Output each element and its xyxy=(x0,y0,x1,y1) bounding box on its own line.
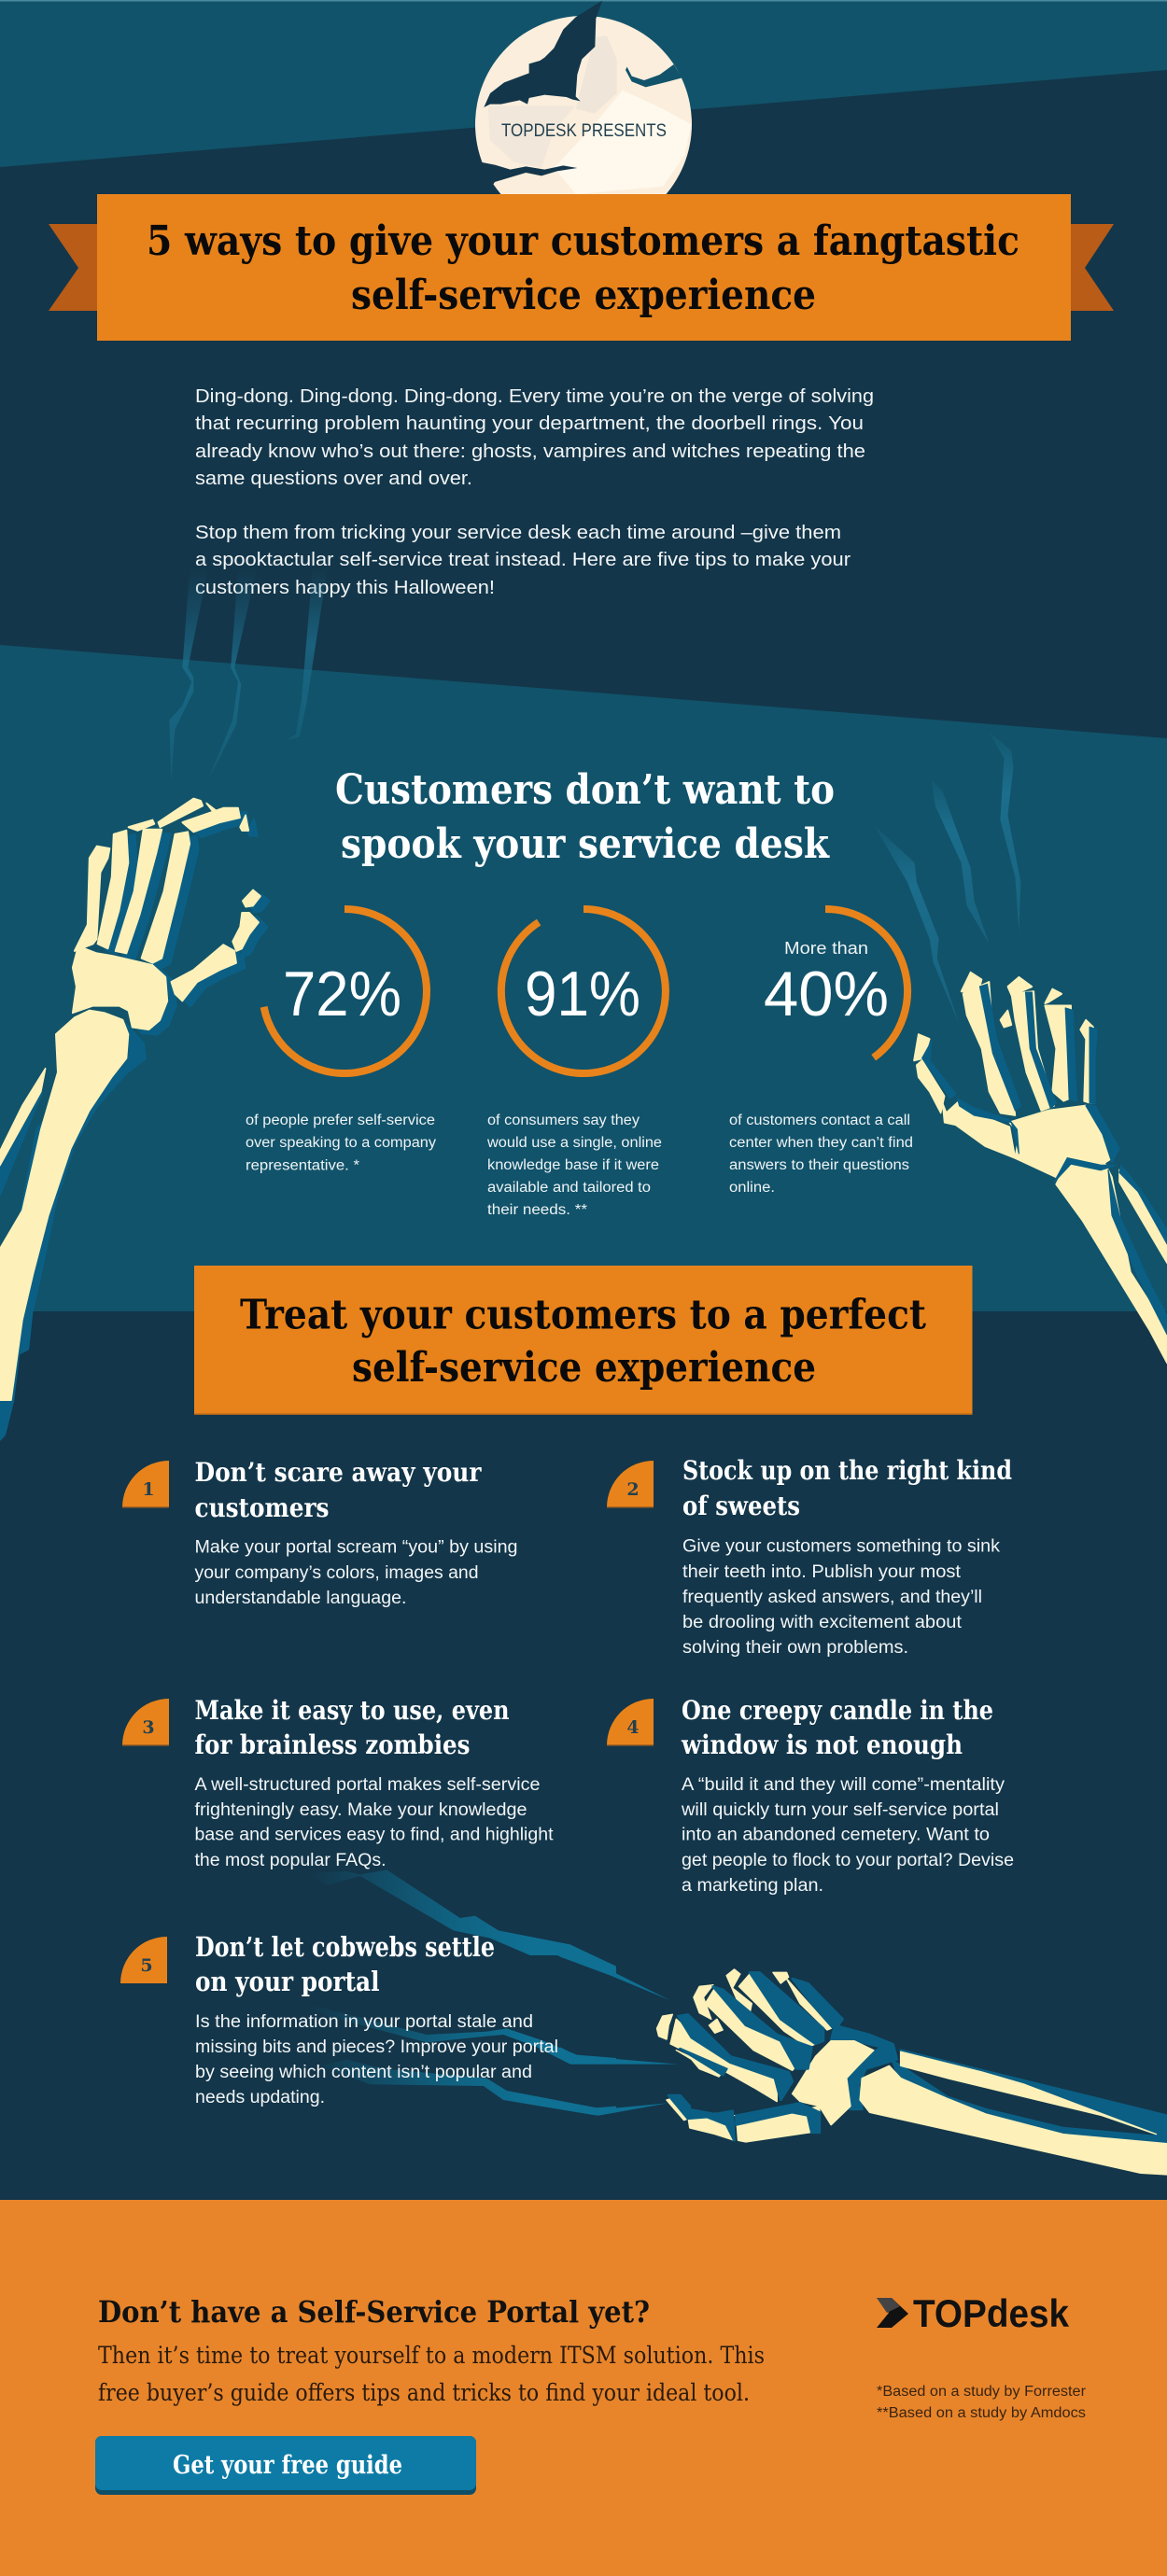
body xyxy=(194,1538,517,1608)
tip 1 xyxy=(122,1457,517,1608)
footnotes: **Based on a study by Amdocs xyxy=(877,2405,1086,2421)
icon: number 5 xyxy=(120,1937,167,1983)
right skeleton hand with wisps xyxy=(874,732,1167,1363)
icon: number 1 xyxy=(122,1461,169,1508)
body: Is the information in your portal stale and xyxy=(195,2012,533,2032)
body: a marketing plan. xyxy=(682,1876,823,1896)
caption xyxy=(729,1113,913,1196)
caption: online. xyxy=(729,1180,775,1196)
icon: tentacle bottom xyxy=(474,161,577,187)
logo: TOPdesk: TOPdesk xyxy=(913,2291,1070,2335)
icon: number 3: 3 xyxy=(142,1717,155,1738)
button xyxy=(95,2436,476,2495)
tip 1: Don’t scare away your xyxy=(194,1457,483,1488)
caption: answers to their questions xyxy=(729,1157,909,1173)
body xyxy=(195,2012,558,2107)
intro text: Ding-dong. Ding-dong. Ding-dong. Every time you’re on the verge of solving xyxy=(195,385,874,407)
body: frighteningly easy. Make your knowledge xyxy=(194,1800,527,1820)
body xyxy=(681,1775,1014,1896)
footer text: free buyer’s guide offers tips and tricks to find your ideal tool. xyxy=(98,2379,750,2406)
tip 4: One creepy candle in the xyxy=(682,1695,993,1726)
banner: treat your customers: Treat your customers to a perfect xyxy=(240,1292,927,1338)
intro text: Stop them from tricking your service desk each time around –give them xyxy=(195,522,841,543)
body: A “build it and they will come”-mentality xyxy=(682,1775,1005,1795)
footnotes xyxy=(877,2384,1086,2421)
stat: 91% xyxy=(486,909,666,1218)
bottom skeleton hand with wisps xyxy=(293,1869,1167,2175)
body: base and services easy to find, and highlight xyxy=(194,1826,554,1844)
footer text: Then it’s time to treat yourself to a modern ITSM solution. This xyxy=(98,2342,765,2369)
icon: number 2: 2 xyxy=(626,1479,640,1500)
wisps xyxy=(293,1869,616,2116)
tip 4 xyxy=(607,1695,1014,1896)
caption xyxy=(486,1113,662,1218)
moon caption: TOPDESK PRESENTS xyxy=(501,121,667,141)
icon: bat xyxy=(484,1,602,107)
banner: treat your customers: self-service experience xyxy=(352,1344,816,1392)
caption: available and tailored to xyxy=(487,1180,651,1196)
caption: of customers contact a call xyxy=(729,1113,910,1128)
caption: representative. * xyxy=(246,1157,359,1174)
stat: 40%: More than xyxy=(784,939,868,958)
title text: self-service experience xyxy=(351,272,816,319)
footer text xyxy=(98,2342,765,2406)
body: be drooling with excitement about xyxy=(682,1613,963,1632)
tip 2 xyxy=(607,1455,1012,1658)
icon: number 3 xyxy=(122,1699,169,1745)
tip 4: window is not enough xyxy=(681,1729,963,1760)
banner: treat your customers xyxy=(194,1266,973,1415)
tip 5: Don’t let cobwebs settle xyxy=(195,1931,495,1963)
body: get people to flock to your portal? Devise xyxy=(682,1851,1014,1870)
body xyxy=(682,1536,1001,1658)
icon: number 4 xyxy=(607,1699,654,1745)
tip 3: Make it easy to use, even xyxy=(194,1695,510,1726)
footnotes: *Based on a study by Forrester xyxy=(877,2384,1086,2400)
section heading: spook: Customers don’t want to xyxy=(335,766,835,814)
body: A well-structured portal makes self-service xyxy=(194,1775,540,1795)
footer heading: Don’t have a Self-Service Portal yet? xyxy=(98,2294,650,2330)
intro text: a spooktactular self-service treat instead. Here are five tips to make your xyxy=(195,549,851,570)
title banner xyxy=(49,194,1114,341)
intro text: already know who’s out there: ghosts, vampires and witches repeating the xyxy=(195,441,865,462)
body: frequently asked answers, and they’ll xyxy=(682,1588,982,1607)
intro text: customers happy this Halloween! xyxy=(195,577,495,598)
stat: 40%: 40% xyxy=(764,959,889,1029)
tip 5 xyxy=(120,1931,558,2107)
footer panel xyxy=(0,2200,1167,2576)
body: understandable language. xyxy=(194,1589,407,1608)
tip 1: customers xyxy=(194,1492,329,1523)
body: into an abandoned cemetery. Want to xyxy=(682,1826,990,1844)
body: their teeth into. Publish your most xyxy=(682,1562,962,1582)
caption: knowledge base if it were xyxy=(487,1157,659,1173)
icon: tentacle right xyxy=(626,64,682,87)
stat: 72%: 72% xyxy=(283,959,401,1029)
body: Make your portal scream “you” by using xyxy=(194,1538,517,1557)
intro text: that recurring problem haunting your department, the doorbell rings. You xyxy=(195,413,864,434)
body: the most popular FAQs. xyxy=(194,1851,387,1870)
stat: 91%: 91% xyxy=(525,959,640,1029)
caption: over speaking to a company xyxy=(246,1135,436,1151)
tip 3: for brainless zombies xyxy=(194,1729,471,1760)
tip 2: of sweets xyxy=(682,1491,800,1521)
icon: number 4: 4 xyxy=(626,1717,640,1738)
caption xyxy=(246,1113,436,1174)
icon: number 5: 5 xyxy=(140,1955,153,1976)
intro text: same questions over and over. xyxy=(195,468,472,489)
body xyxy=(194,1775,554,1870)
caption: of consumers say they xyxy=(487,1113,640,1128)
stat: 72% xyxy=(246,909,436,1174)
caption: would use a single, online xyxy=(486,1135,662,1151)
caption: their needs. ** xyxy=(487,1202,587,1218)
section heading: spook: spook your service desk xyxy=(341,820,830,868)
body: will quickly turn your self-service portal xyxy=(681,1800,999,1820)
caption: of people prefer self-service xyxy=(246,1113,435,1128)
title text: 5 ways to give your customers a fangtastic xyxy=(147,217,1019,265)
body: Give your customers something to sink xyxy=(682,1536,1001,1557)
button: Get your free guide xyxy=(173,2451,402,2480)
body: by seeing which content isn’t popular and xyxy=(195,2063,532,2082)
body: your company’s colors, images and xyxy=(194,1563,478,1583)
icon: number 1: 1 xyxy=(142,1479,155,1500)
stat: 40% xyxy=(729,909,913,1196)
tip 3 xyxy=(122,1695,554,1870)
caption: center when they can’t find xyxy=(729,1135,913,1151)
tip 2: Stock up on the right kind xyxy=(682,1455,1012,1486)
intro text xyxy=(195,385,874,598)
body: solving their own problems. xyxy=(682,1638,908,1658)
body: missing bits and pieces? Improve your portal xyxy=(195,2037,558,2057)
moon with bat xyxy=(474,1,692,232)
tip 5: on your portal xyxy=(195,1966,379,1997)
body: needs updating. xyxy=(195,2088,325,2107)
left skeleton hand with wisps xyxy=(0,567,328,1439)
icon: number 2 xyxy=(607,1461,654,1508)
